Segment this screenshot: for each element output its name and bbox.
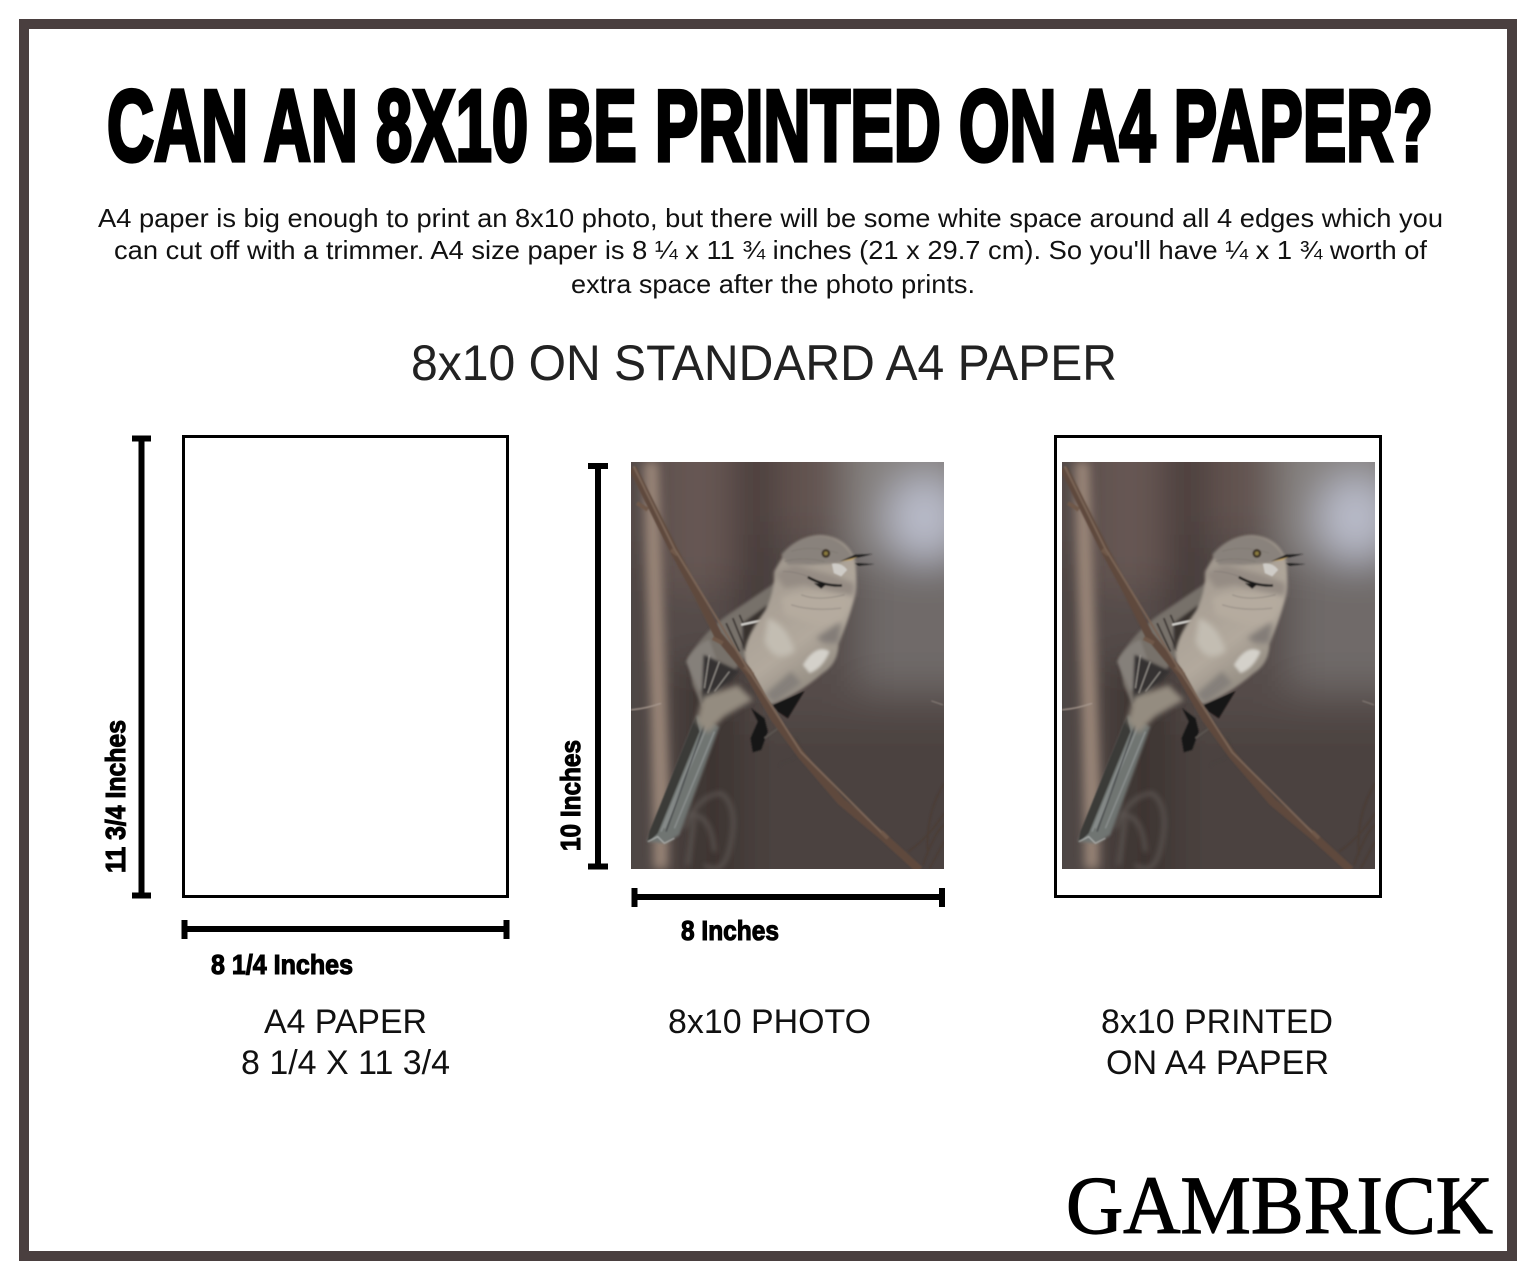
bird photo on sheet <box>989 388 1456 955</box>
panel: 8x10 photo <box>555 388 1025 1041</box>
logo: Gambrick: GAMBRICK <box>1066 1159 1493 1251</box>
A4 paper sheet outline <box>184 436 508 896</box>
caption: 8x10 PRINTED <box>1101 1003 1333 1041</box>
width label: 8 Inches <box>681 915 779 946</box>
intro paragraph: extra space after the photo prints. <box>571 269 975 299</box>
height label: 11 3/4 Inches <box>100 720 131 873</box>
height label: 10 Inches <box>555 740 586 851</box>
panel: 8x10 printed on A4 <box>989 388 1456 1082</box>
intro paragraph <box>98 203 1443 299</box>
A4 sheet outline <box>1056 436 1380 896</box>
height dimension arrow <box>132 436 151 897</box>
caption: 8x10 PHOTO <box>668 1003 871 1041</box>
intro paragraph: can cut off with a trimmer. A4 size paper is 8 ¼ x 11 ¾ inches (21 x 29.7 cm). So you'll have ¼ x 1 ¾ worth of <box>114 235 1428 265</box>
width dimension arrow <box>632 888 945 907</box>
panel: A4 paper <box>100 436 509 1082</box>
caption <box>1101 1003 1333 1082</box>
intro paragraph: A4 paper is big enough to print an 8x10 photo, but there will be some white space around all 4 edges which you <box>98 203 1443 233</box>
width label: 8 1/4 Inches <box>211 949 353 980</box>
caption: A4 PAPER <box>264 1003 427 1041</box>
bird photo <box>558 388 1025 955</box>
section heading: 8x10 ON STANDARD A4 PAPER <box>411 335 1117 391</box>
caption: ON A4 PAPER <box>1106 1044 1329 1082</box>
caption <box>241 1003 450 1082</box>
caption: 8 1/4 X 11 3/4 <box>241 1044 450 1082</box>
height dimension arrow <box>588 464 608 869</box>
width dimension arrow <box>183 920 509 939</box>
